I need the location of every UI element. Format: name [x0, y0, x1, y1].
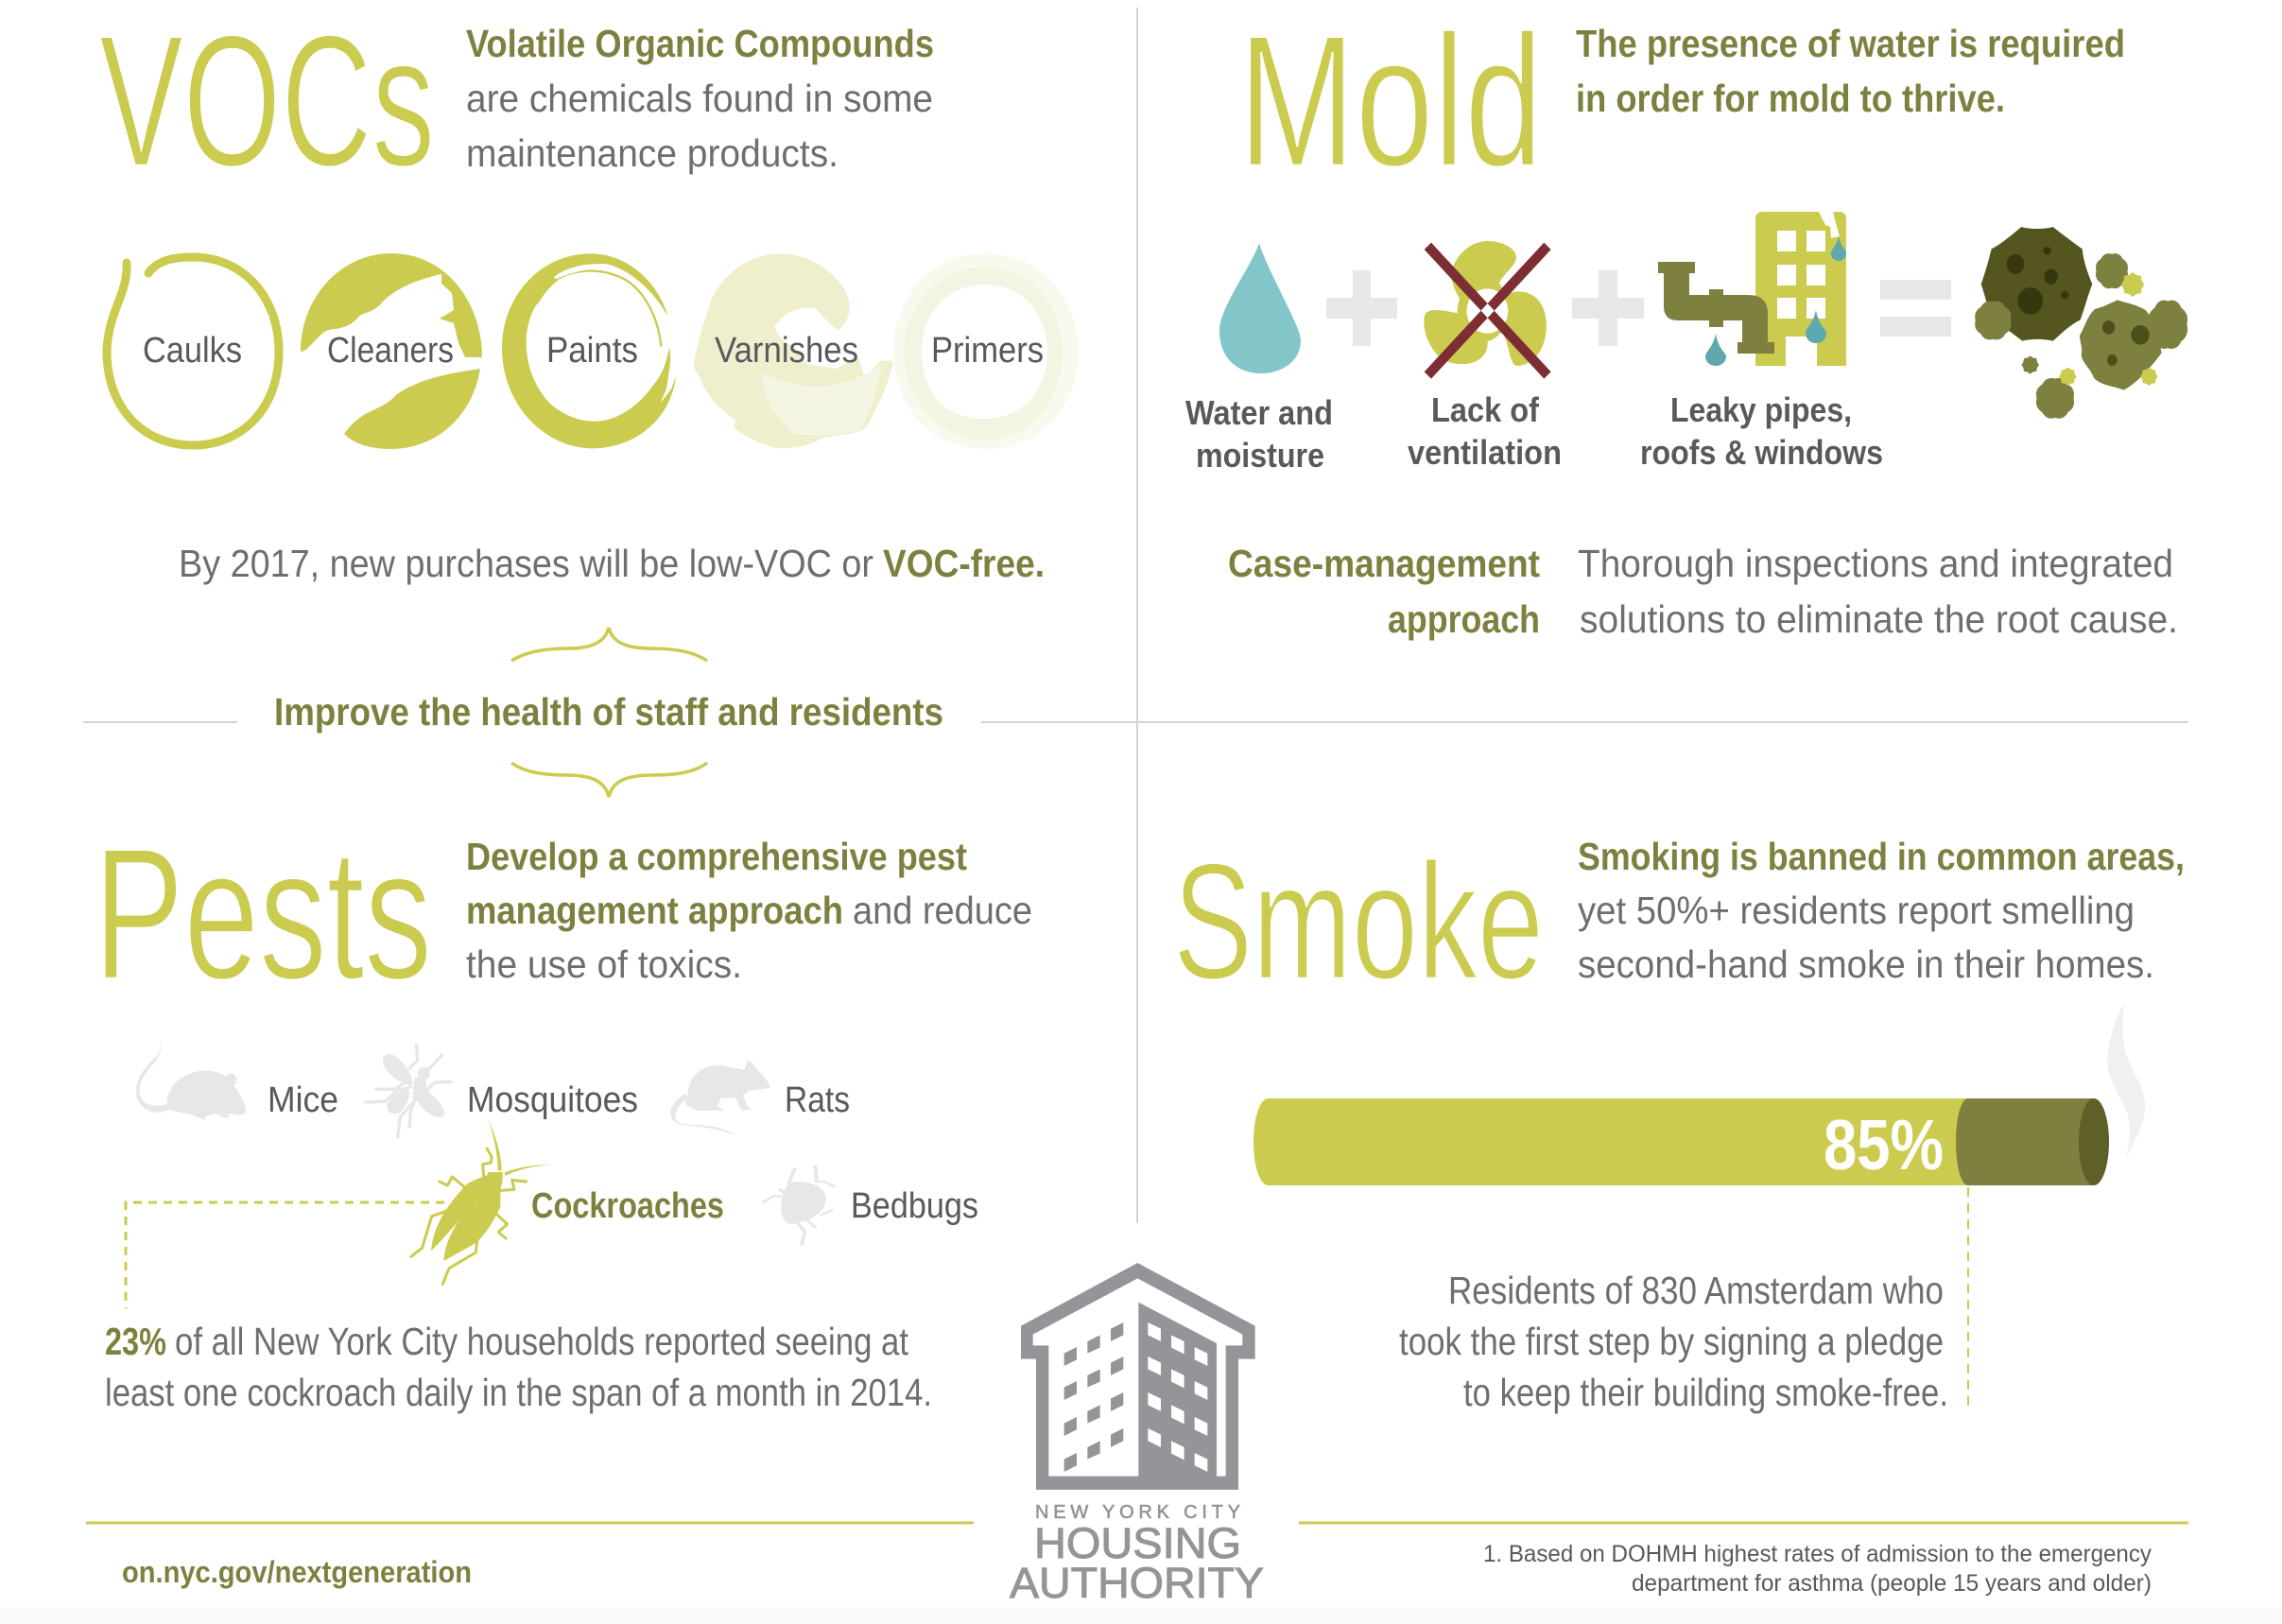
wordmark: NEW YORK CITY — [1035, 1502, 1240, 1523]
chart: 85% cigarette bar — [1253, 1098, 2109, 1185]
text: smoke-free pledge: Residents of 830 Amsterdam who — [1448, 1269, 1944, 1312]
panel: Smoke — [1173, 830, 2185, 1414]
labels: mold causes: Water and — [1185, 393, 1333, 432]
heading: improve health: Improve the health of staff and residents — [274, 690, 943, 734]
text: case-management approach: approach — [1388, 597, 1540, 641]
footer — [86, 1523, 2188, 1597]
text block: smoking policy: yet 50%+ residents report smelling — [1578, 889, 2135, 932]
footnote — [1483, 1541, 2152, 1597]
text: case-management approach: Case-management — [1228, 542, 1540, 585]
icon: mold spores — [1975, 227, 2187, 419]
logo: NYC Housing Authority — [1010, 1263, 1264, 1607]
icon: rat — [670, 1061, 770, 1136]
icon: plus — [1326, 270, 1397, 346]
text: low-VOC commitment: By 2017, new purchases will be low-VOC or — [179, 542, 873, 585]
icon: bedbug — [764, 1166, 834, 1245]
icon: cleaners ring: Cleaners — [327, 331, 454, 371]
icon: crossed-out fan — [1424, 241, 1551, 379]
dashed connector: bar to text — [1967, 1187, 1969, 1407]
icon: varnishes blob — [693, 253, 893, 448]
icon: primers ring — [893, 253, 1079, 449]
dashed connector: cockroach to statistic — [126, 1202, 444, 1308]
text: case-management approach: solutions to eliminate the root cause. — [1580, 597, 2178, 641]
icon: smoke wisp — [2107, 1002, 2145, 1158]
wordmark: AUTHORITY — [1010, 1559, 1264, 1607]
footnote: 1. Based on DOHMH highest rates of admission to the emergency — [1483, 1541, 2152, 1567]
footnote: department for asthma (people 15 years and older) — [1632, 1570, 2152, 1597]
text block: VOCs definition: are chemicals found in some — [466, 77, 933, 120]
text: low-VOC commitment: VOC-free. — [883, 542, 1045, 585]
panel: VOCs — [99, 0, 1079, 585]
panel: Mold — [1185, 0, 2187, 641]
text: case-management approach — [1228, 542, 2178, 641]
icon: primers ring: Primers — [931, 331, 1044, 371]
icon: caulks ring — [107, 257, 279, 445]
text block: mold requirement: in order for mold to thrive. — [1576, 77, 2005, 120]
text: cockroach statistic: of all New York City households reported seeing at — [175, 1320, 909, 1363]
labels: mold causes — [1185, 390, 1883, 475]
title: Smoke: Smoke — [1173, 830, 1544, 1014]
title: Mold: Mold — [1238, 0, 1543, 205]
text block: pest management — [466, 835, 1032, 986]
icon: cleaners ring — [301, 253, 482, 449]
icon: leaky building — [1755, 212, 1846, 366]
text: cockroach statistic: least one cockroach daily in the span of a month in 2014. — [105, 1371, 932, 1414]
text block: smoking policy — [1578, 835, 2185, 986]
text: smoke-free pledge — [1399, 1269, 1948, 1414]
text: cockroach statistic: 23% — [105, 1320, 166, 1363]
text block: pest management: and reduce — [853, 889, 1032, 932]
text block: VOCs definition — [466, 22, 934, 175]
text block: pest management: management approach — [466, 889, 843, 932]
panel: Pests — [94, 809, 1032, 1414]
chart: 85% cigarette bar: 85% — [1824, 1105, 1944, 1184]
text block: VOCs definition: maintenance products. — [466, 131, 838, 175]
icon: equals — [1880, 280, 1951, 337]
text block: pest management: Develop a comprehensive pest — [466, 835, 967, 878]
central message — [274, 628, 943, 797]
icon: paints ring — [502, 253, 676, 448]
text block: pest management: the use of toxics. — [466, 942, 742, 986]
icon: caulks ring: Caulks — [143, 331, 242, 371]
text: smoke-free pledge: to keep their building smoke-free. — [1463, 1371, 1948, 1414]
label: cockroaches: Cockroaches — [531, 1186, 724, 1226]
labels: mold causes: Lack of — [1431, 390, 1540, 429]
link: website: on.nyc.gov/nextgeneration — [122, 1555, 472, 1589]
label: mice: Mice — [268, 1080, 338, 1120]
labels: mold causes: ventilation — [1408, 433, 1562, 472]
wordmark: HOUSING — [1034, 1519, 1241, 1567]
icon: top brace — [511, 628, 707, 661]
icon: varnishes blob: Varnishes — [715, 331, 858, 371]
text block: mold requirement: The presence of water is required — [1576, 22, 2125, 65]
label: bedbugs: Bedbugs — [851, 1186, 978, 1226]
text block: VOCs definition: Volatile Organic Compounds — [466, 22, 934, 65]
labels: mold causes: roofs & windows — [1640, 433, 1883, 472]
labels: mold causes: moisture — [1196, 436, 1324, 475]
text block: mold requirement — [1576, 22, 2125, 120]
icon: leaky pipe — [1658, 262, 1774, 366]
icon: mosquito — [366, 1045, 451, 1137]
title: VOCs: VOCs — [99, 0, 435, 205]
text block: smoking policy: second-hand smoke in their homes. — [1578, 942, 2154, 986]
icon: building — [1021, 1263, 1255, 1490]
icon: cockroach — [411, 1120, 551, 1284]
title: Pests: Pests — [94, 809, 432, 1018]
text: smoke-free pledge: took the first step by signing a pledge — [1399, 1320, 1944, 1363]
icon: paints ring: Paints — [546, 331, 638, 371]
text: case-management approach: Thorough inspections and integrated — [1578, 542, 2173, 585]
text block: smoking policy: Smoking is banned in common areas, — [1578, 835, 2185, 878]
wordmark — [1010, 1502, 1264, 1607]
label: rats: Rats — [785, 1080, 850, 1120]
icon: plus — [1572, 270, 1644, 346]
icon: water drop — [1219, 243, 1301, 373]
icon: mouse — [136, 1038, 246, 1119]
icon: bottom brace — [511, 763, 707, 797]
labels: mold causes: Leaky pipes, — [1670, 390, 1852, 429]
label: mosquitoes: Mosquitoes — [467, 1080, 638, 1120]
text: cockroach statistic — [105, 1320, 932, 1414]
